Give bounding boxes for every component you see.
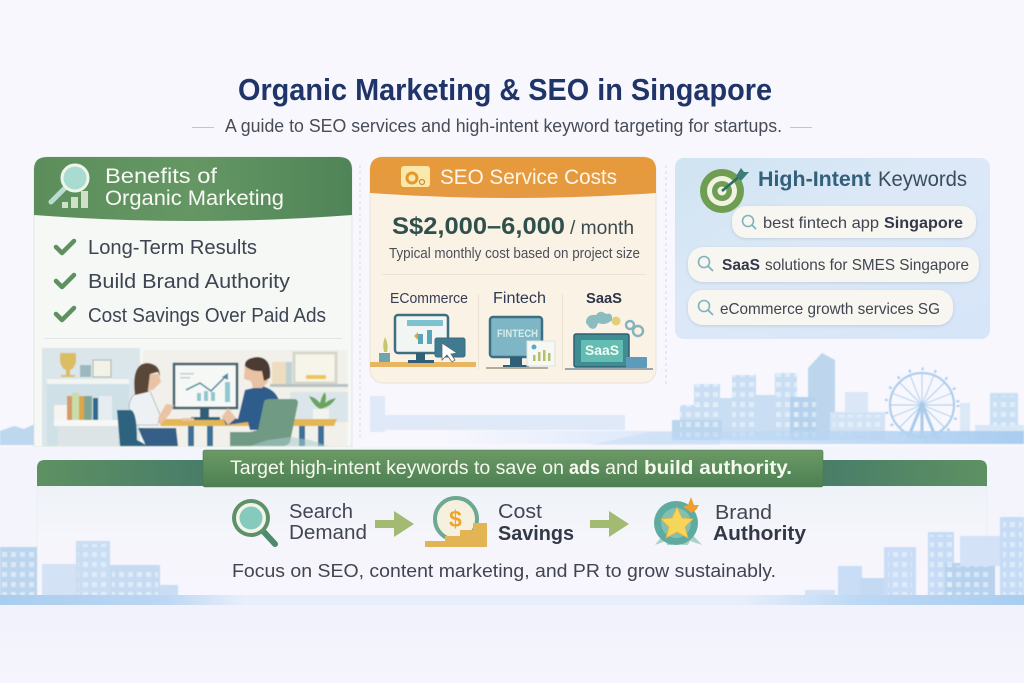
price: / month xyxy=(570,218,634,239)
person: man xyxy=(222,357,280,430)
panel divider dashed left xyxy=(359,165,361,440)
icon: orange badge xyxy=(401,166,430,187)
benefit list: Build Brand Authority xyxy=(88,270,291,293)
arrow xyxy=(590,511,629,537)
sector: ecommerce: ECommerce xyxy=(390,290,468,307)
subtitle with dashes: A guide to SEO services and high-intent keyword targeting for startups. xyxy=(225,116,782,136)
sector: ecommerce xyxy=(370,290,476,367)
arrow xyxy=(375,511,414,537)
keyword pill 2 xyxy=(688,247,979,282)
price: S$2,000–6,000 xyxy=(392,213,565,240)
panel: high-intent keywords xyxy=(675,158,990,339)
price note: Typical monthly cost based on project size xyxy=(389,246,640,262)
monitor with chart xyxy=(174,364,237,420)
step: brand authority: Authority xyxy=(713,523,807,545)
panel header xyxy=(34,157,352,221)
skyline: ground band xyxy=(440,431,1024,444)
banner xyxy=(203,450,823,487)
step: search demand: Demand xyxy=(289,522,367,544)
step: cost savings xyxy=(425,498,574,547)
skyline: ferris wheel xyxy=(886,369,958,441)
illustration: office team at monitor xyxy=(42,348,348,446)
panel body xyxy=(370,157,656,383)
panel body xyxy=(675,158,990,339)
skyline: faint centre harbour xyxy=(370,396,720,445)
lower skyline left xyxy=(0,541,178,603)
panel header xyxy=(370,157,656,198)
keyword pill 3: eCommerce growth services SG xyxy=(720,301,940,318)
upper skyline backdrop xyxy=(0,353,1024,445)
benefit list xyxy=(56,236,326,327)
bookshelf books xyxy=(54,393,112,420)
sector: fintech: Fintech xyxy=(493,290,546,307)
framed certificate xyxy=(93,360,111,377)
step: search demand: Search xyxy=(289,501,353,523)
trophy xyxy=(60,353,76,377)
benefit list: Long-Term Results xyxy=(88,236,257,259)
lower skyline ground band xyxy=(0,595,1024,605)
sector: saas: SaaS xyxy=(585,342,619,358)
header strip xyxy=(37,460,987,486)
panel body xyxy=(37,486,987,596)
panel: bottom takeaway xyxy=(0,450,1024,605)
closing statement: Focus on SEO, content marketing, and PR to grow sustainably. xyxy=(232,560,776,581)
keyword pill 1 xyxy=(732,206,976,238)
person: woman xyxy=(117,363,194,446)
keyword pill 3 xyxy=(688,290,953,325)
keyword pill 1: best fintech app xyxy=(763,215,879,232)
panel heading: Organic Marketing xyxy=(105,187,284,210)
sector: saas: SaaS xyxy=(586,290,622,307)
panel heading: Keywords xyxy=(878,168,967,191)
keyword pill 1: Singapore xyxy=(884,215,963,232)
panel heading: High-Intent xyxy=(758,168,871,191)
step: cost savings: Savings xyxy=(498,523,574,545)
banner: ads xyxy=(569,458,600,479)
panel body xyxy=(34,157,352,447)
lower section backdrop xyxy=(0,447,1024,600)
panel heading xyxy=(758,168,967,191)
keyword pill 2: solutions for SMES Singapore xyxy=(765,257,969,274)
keyword pill 2: SaaS xyxy=(722,257,760,274)
banner: Target high-intent keywords to save on xyxy=(230,458,564,479)
step: search demand xyxy=(232,499,367,544)
step: brand authority xyxy=(654,497,807,545)
lower skyline right xyxy=(805,517,1024,602)
banner: build authority. xyxy=(644,458,792,479)
desk xyxy=(158,419,337,446)
sector: fintech: FINTECH xyxy=(497,328,538,340)
icon: target with dart xyxy=(700,168,749,213)
teal hill overlay xyxy=(250,437,328,446)
sector: saas xyxy=(565,290,653,370)
panel: benefits of organic marketing xyxy=(34,157,352,447)
panel heading: SEO Service Costs xyxy=(440,165,617,189)
title: Organic Marketing & SEO in Singapore xyxy=(238,73,772,107)
banner: and xyxy=(605,458,638,479)
skyline: right city buildings xyxy=(672,353,1024,440)
panel heading xyxy=(105,165,284,210)
panel heading: Benefits of xyxy=(105,165,217,188)
step: brand authority: Brand xyxy=(715,502,772,524)
step: cost savings: Cost xyxy=(498,501,542,523)
potted plant xyxy=(309,392,336,419)
sector: fintech xyxy=(486,290,555,369)
panel divider dashed right xyxy=(665,165,667,385)
step: cost savings: $ xyxy=(449,506,462,532)
panel: seo service costs xyxy=(370,157,656,383)
icon: magnifier with bars xyxy=(51,165,88,208)
wall frame xyxy=(294,353,336,383)
price xyxy=(392,213,634,240)
green office chair xyxy=(230,399,298,446)
skyline: left hills xyxy=(0,424,35,445)
benefit list: Cost Savings Over Paid Ads xyxy=(88,304,326,327)
